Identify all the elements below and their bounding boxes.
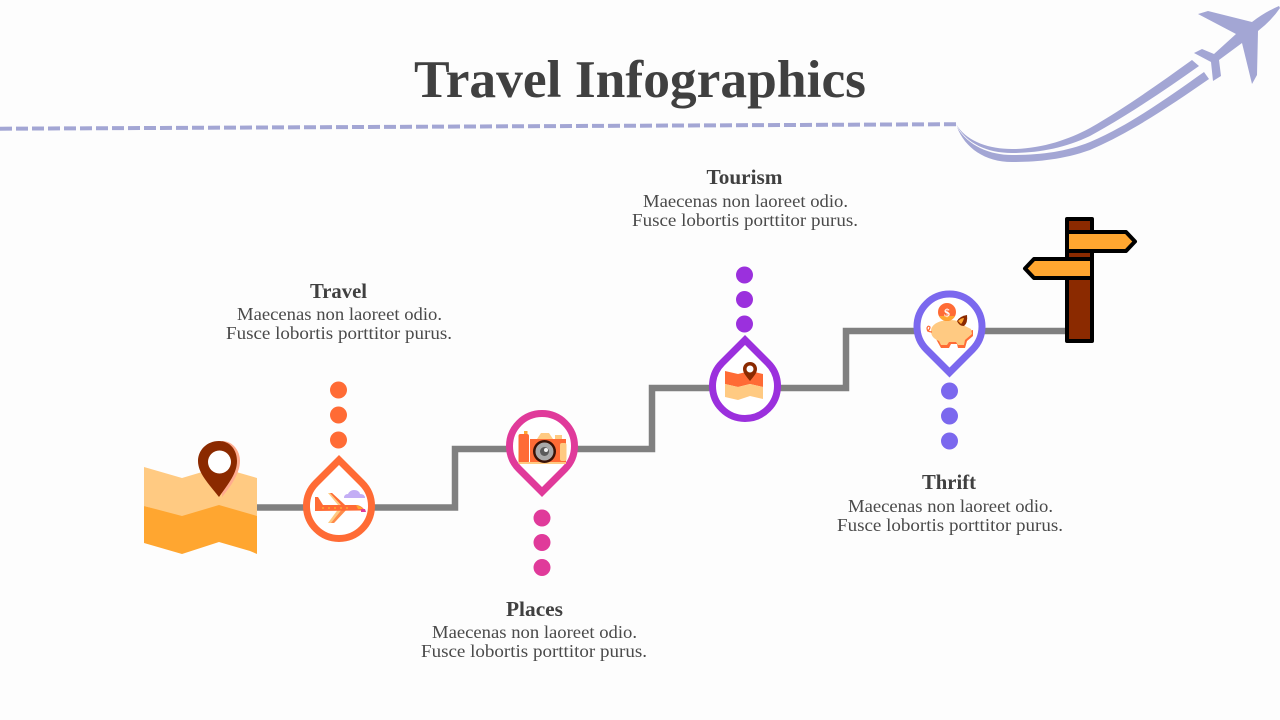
text: travel bbox=[226, 279, 452, 343]
text: thrift: Fusce lobortis porttitor purus. bbox=[837, 515, 1063, 535]
text: tourism bbox=[632, 165, 858, 230]
text: places: Fusce lobortis porttitor purus. bbox=[421, 641, 647, 661]
text: tourism: Fusce lobortis porttitor purus. bbox=[632, 210, 858, 230]
text: travel: Travel bbox=[310, 279, 367, 303]
marker: travel (orange teardrop with plane) bbox=[306, 460, 371, 538]
icon: start map with pin bbox=[144, 441, 257, 554]
text: tourism: Maecenas non laoreet odio. bbox=[643, 191, 848, 211]
dots: travel bbox=[330, 382, 347, 448]
title: Travel Infographics bbox=[414, 51, 866, 109]
icon: plane and cloud bbox=[315, 490, 366, 523]
text: thrift: Thrift bbox=[922, 470, 976, 494]
dashed flight path bbox=[0, 124, 957, 129]
icon: airplane with contrails bbox=[956, 6, 1280, 162]
text: places: Places bbox=[506, 597, 563, 621]
icon: piggy bank: $ bbox=[944, 306, 950, 320]
marker: places (pink pin with camera) bbox=[509, 414, 574, 492]
text: travel: Fusce lobortis porttitor purus. bbox=[226, 323, 452, 343]
dots: places bbox=[534, 510, 550, 576]
marker: thrift (violet pin with piggy bank) bbox=[917, 294, 982, 372]
dots: thrift bbox=[941, 382, 958, 450]
marker: tourism (purple teardrop with map) bbox=[712, 340, 778, 418]
text: travel: Maecenas non laoreet odio. bbox=[237, 304, 442, 324]
text: places: Maecenas non laoreet odio. bbox=[432, 622, 637, 642]
text: thrift bbox=[837, 470, 1063, 535]
icon: signpost bbox=[1025, 219, 1135, 341]
text: tourism: Tourism bbox=[706, 165, 783, 189]
icon: camera bbox=[518, 431, 566, 464]
text: thrift: Maecenas non laoreet odio. bbox=[848, 496, 1053, 516]
text: places bbox=[421, 597, 647, 661]
dots: tourism bbox=[736, 266, 753, 332]
icon: folded map with pin bbox=[725, 362, 763, 400]
stepped route line bbox=[257, 331, 1068, 508]
